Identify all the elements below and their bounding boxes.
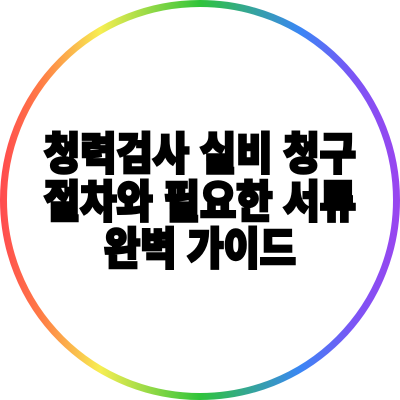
title line 3: 완벽 가이드 bbox=[104, 225, 296, 274]
title bbox=[44, 130, 356, 274]
title line 1: 청력검사 실비 청구 bbox=[44, 130, 356, 179]
title line 2: 절차와 필요한 서류 bbox=[44, 178, 356, 227]
